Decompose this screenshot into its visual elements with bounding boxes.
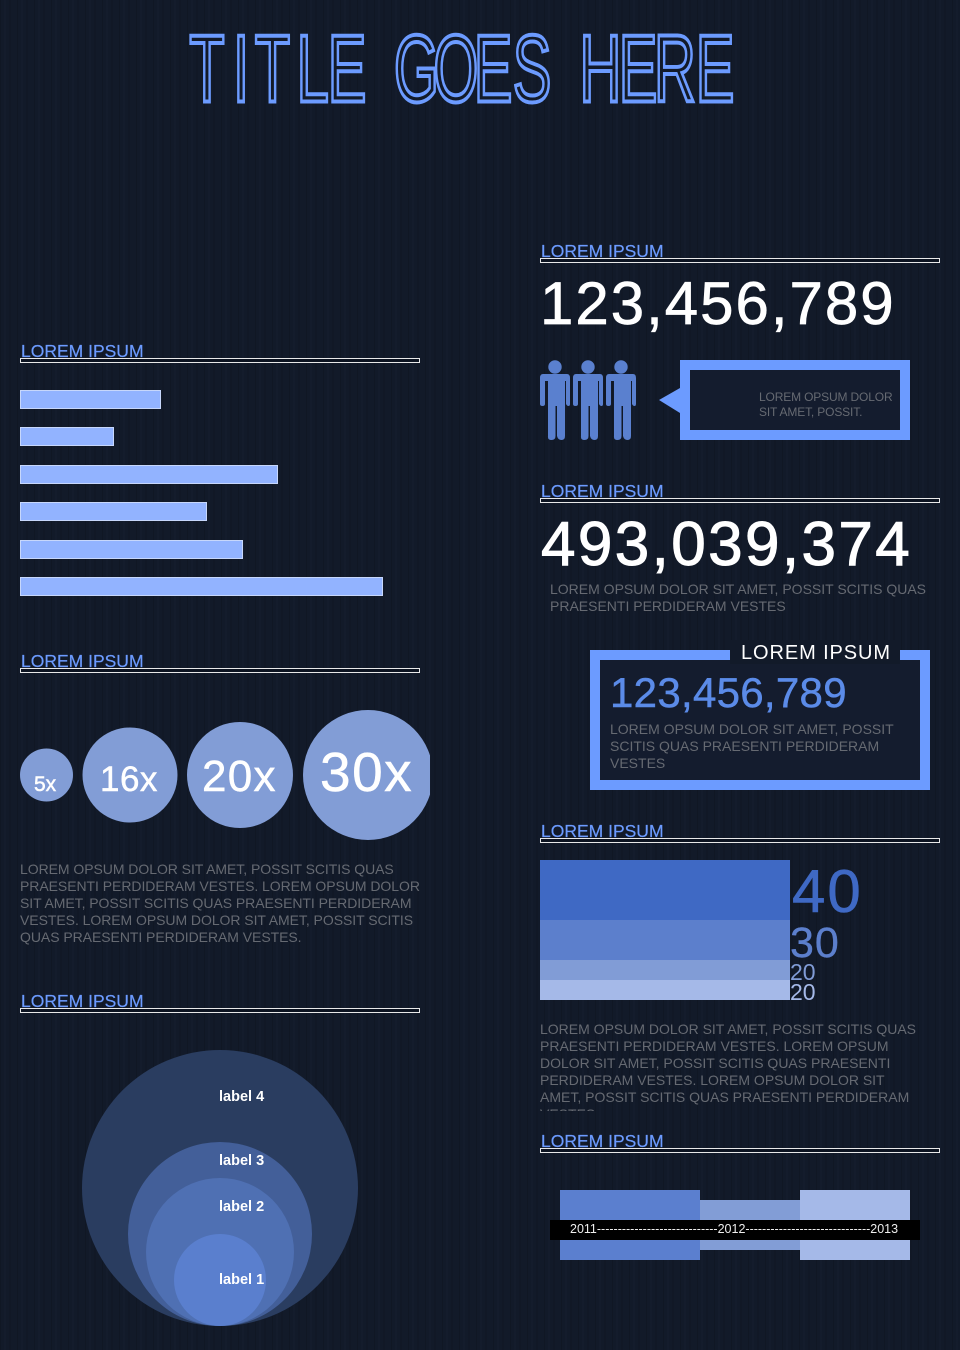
stacked bar: 40	[792, 858, 863, 925]
stacked bar: 30	[790, 919, 840, 967]
circle multipliers: 20x	[202, 752, 277, 801]
circle multipliers	[20, 710, 430, 840]
nested circles: label 1	[219, 1272, 264, 1288]
stacked bar description: PRAESENTI PERDIDERAM VESTES. LOREM OPSUM	[540, 1038, 889, 1054]
callout: SIT AMET, POSSIT.	[759, 405, 862, 419]
nested circles: label 4	[219, 1089, 264, 1105]
circles description: SIT AMET, POSSIT SCITIS QUAS PRAESENTI PERDIDERAM	[20, 895, 411, 911]
framed stat panel	[590, 642, 930, 790]
heading: bar chart	[20, 341, 420, 363]
heading: timeline	[540, 1131, 940, 1153]
stacked bar description: PERDIDERAM VESTES. LOREM OPSUM DOLOR SIT	[540, 1072, 885, 1088]
second big number: 493,039,374	[541, 510, 912, 579]
circles description	[20, 861, 420, 945]
heading: timeline: LOREM IPSUM	[541, 1131, 664, 1151]
heading: total	[540, 241, 940, 263]
heading: total: LOREM IPSUM	[541, 241, 664, 261]
circles description: PRAESENTI PERDIDERAM VESTES. LOREM OPSUM DOLOR	[20, 878, 420, 894]
nested circles: label 3	[219, 1153, 264, 1169]
circles description: QUAS PRAESENTI PERDIDERAM VESTES.	[20, 929, 302, 945]
callout	[659, 360, 910, 440]
stacked bar: 20	[790, 959, 816, 985]
circle multipliers: 30x	[320, 741, 413, 803]
second number description: PRAESENTI PERDIDERAM VESTES	[550, 598, 786, 614]
heading: circles	[20, 651, 420, 673]
stacked bar	[540, 858, 863, 1005]
framed stat panel: 123,456,789	[610, 669, 847, 716]
second number description: LOREM OPSUM DOLOR SIT AMET, POSSIT SCITIS QUAS	[550, 581, 926, 597]
stacked bar description: DOLOR SIT AMET, POSSIT SCITIS QUAS PRAESENTI	[540, 1055, 890, 1071]
icon: three people	[540, 360, 636, 440]
heading: nested circles: LOREM IPSUM	[21, 991, 144, 1011]
title: TITLEGOESHERE	[189, 14, 734, 122]
timeline	[550, 1190, 920, 1260]
framed stat panel: VESTES	[610, 755, 665, 771]
circles description: VESTES. LOREM OPSUM DOLOR SIT AMET, POSSIT SCITIS	[20, 912, 413, 928]
heading: circles: LOREM IPSUM	[21, 651, 144, 671]
callout: LOREM OPSUM DOLOR	[759, 390, 892, 404]
framed stat panel: LOREM IPSUM	[741, 642, 891, 664]
stacked bar description	[540, 1021, 916, 1111]
stacked bar description: AMET, POSSIT SCITIS QUAS PRAESENTI PERDIDERAM	[540, 1089, 909, 1105]
heading: second total: LOREM IPSUM	[541, 481, 664, 501]
second number description	[550, 581, 926, 614]
heading: bar chart: LOREM IPSUM	[21, 341, 144, 361]
stacked bar description: LOREM OPSUM DOLOR SIT AMET, POSSIT SCITIS QUAS	[540, 1021, 916, 1037]
circles description: LOREM OPSUM DOLOR SIT AMET, POSSIT SCITIS QUAS	[20, 861, 394, 877]
circle multipliers: 16x	[100, 760, 158, 799]
circle multipliers: 5x	[34, 773, 57, 796]
bar chart	[20, 390, 383, 596]
heading: stacked bar: LOREM IPSUM	[541, 821, 664, 841]
nested circles: label 2	[219, 1199, 264, 1215]
framed stat panel: LOREM OPSUM DOLOR SIT AMET, POSSIT	[610, 721, 894, 737]
framed stat panel: SCITIS QUAS PRAESENTI PERDIDERAM	[610, 738, 879, 754]
stacked bar: 20	[790, 979, 816, 1005]
heading: stacked bar	[540, 821, 940, 843]
heading: nested circles	[20, 991, 420, 1013]
timeline: 2011-----------------------------2012------------------------------2013	[570, 1222, 898, 1236]
nested circles	[82, 1050, 358, 1326]
big number: 123,456,789	[540, 270, 896, 337]
heading: second total	[540, 481, 940, 503]
